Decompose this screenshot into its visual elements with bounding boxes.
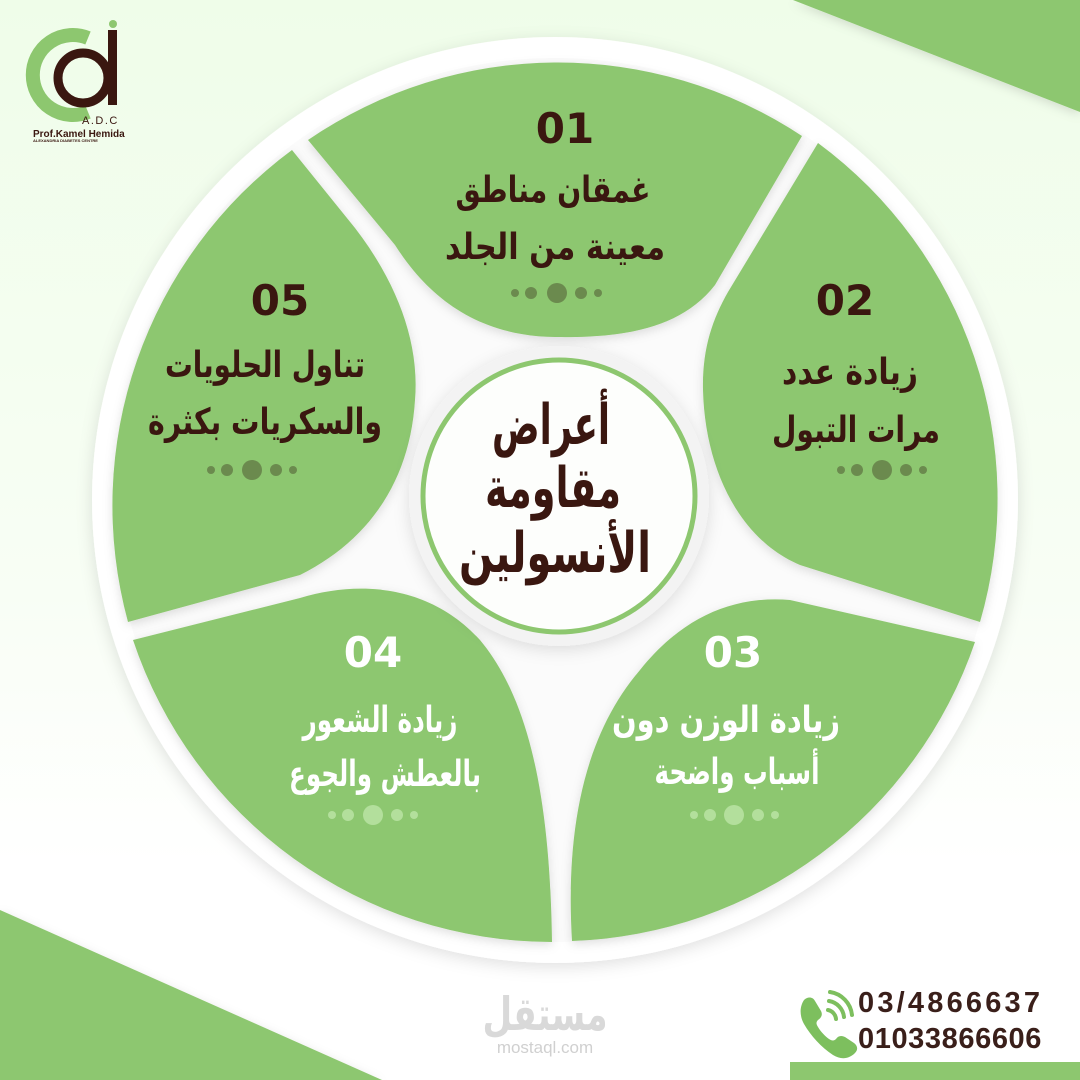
contact numbers: 03/4866637 [858,987,1043,1019]
center circle title: الأنسولين [459,518,651,586]
watermark: مستقل [482,987,608,1041]
panel: petal 02: 02 [816,276,874,325]
panel: petal 05: 05 [251,276,309,325]
logo: ALEXANDRIA DIABETES CENTRE [33,138,98,143]
panel: petal 02: زيادة عدد [782,352,918,393]
panel: petal 04: زيادة الشعور [301,700,458,741]
watermark [482,987,608,1057]
icon: phone [801,992,857,1058]
decoration: bottom-left green triangle [0,910,382,1080]
decoration: bottom-right green bar [790,1062,1080,1080]
panel: petal 03: زيادة الوزن دون [612,700,840,741]
contact numbers: 01033866606 [858,1023,1042,1055]
panel: petal 04 [133,589,552,942]
center circle title: أعراض [492,388,610,458]
contact numbers [858,987,1043,1055]
logo [33,20,125,143]
logo: A.D.C [82,115,119,127]
panel: petal 04: 04 [344,628,402,677]
panel: petal 01: 01 [536,104,594,153]
decoration: top-right green band [793,0,1080,112]
panel: petal 01: غمقان مناطق [456,170,650,211]
panel: petal 03: أسباب واضحة [654,748,820,793]
panel: petal 03 [571,599,975,941]
logo: Prof.Kamel Hemida [33,129,125,140]
center circle title: مقاومة [485,456,621,521]
panel: petal 05 [112,150,416,622]
panel: petal 01: معينة من الجلد [445,227,665,268]
panel: petal 01 [308,63,802,337]
panel: petal 02: مرات التبول [772,410,940,451]
panel: petal 03: 03 [704,628,762,677]
panel: petal 04: بالعطش والجوع [289,754,481,795]
watermark: mostaql.com [497,1038,593,1057]
panel: petal 02 [703,143,998,622]
center circle title [409,346,709,646]
panel: petal 05: تناول الحلويات [165,345,365,386]
panel: petal 05: والسكريات بكثرة [148,402,382,443]
outer white ring [92,37,1018,963]
